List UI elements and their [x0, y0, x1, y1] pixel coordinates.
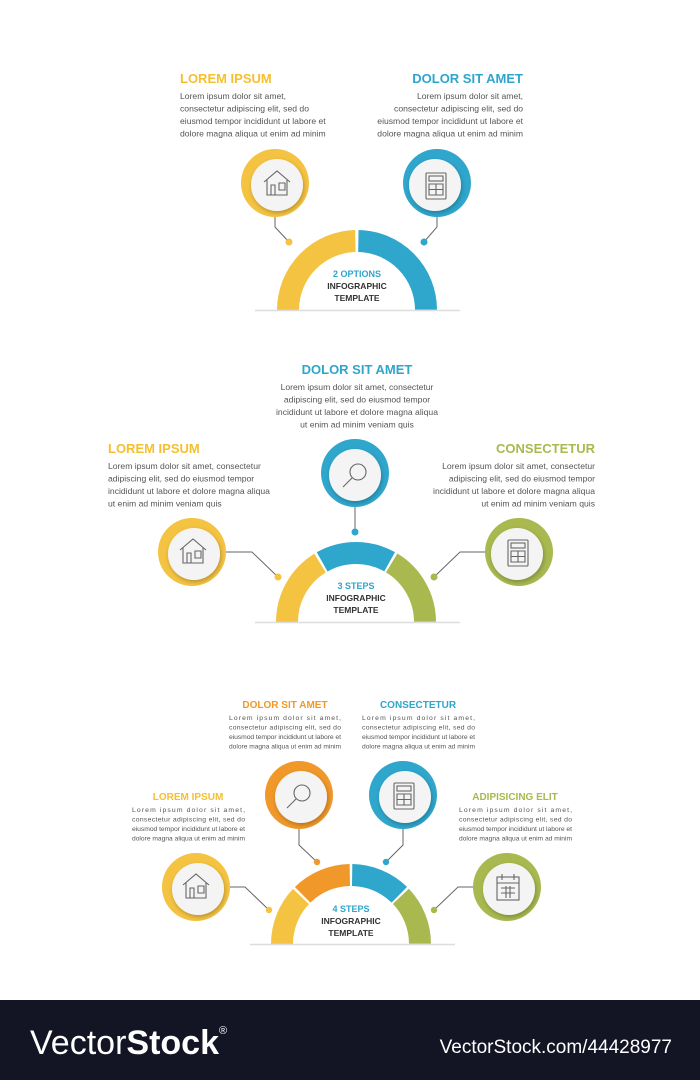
- icon circle: magnifier: [321, 439, 389, 507]
- footer logo: VectorStock: [30, 1024, 219, 1062]
- text block: dolore magna aliqua ut enim ad minim: [459, 836, 572, 842]
- heading: lorem ipsum: LOREM IPSUM: [153, 792, 223, 803]
- icon circle: calculator: [369, 761, 437, 829]
- text block: consectetur adipiscing elit, sed do: [132, 816, 245, 824]
- half ring: [255, 241, 460, 310]
- section 2: 3 steps: [108, 362, 596, 622]
- heading: consectetur: CONSECTETUR: [496, 441, 596, 456]
- text block: dolore magna aliqua ut enim ad minim: [362, 744, 475, 750]
- text block right: Lorem ipsum dolor sit amet,: [417, 91, 523, 101]
- text block: eiusmod tempor incididunt ut labore et: [459, 826, 572, 833]
- icon circle: house: [162, 853, 230, 921]
- text block left: consectetur adipiscing elit, sed do: [180, 104, 309, 114]
- text block: [362, 715, 475, 750]
- text block: consectetur adipiscing elit, sed do: [459, 816, 572, 824]
- center label: 3 STEPS: [337, 581, 375, 591]
- text block top: adipiscing elit, sed do eiusmod tempor: [284, 394, 430, 404]
- text block: consectetur adipiscing elit, sed do: [362, 724, 475, 732]
- text block top: incididunt ut labore et dolore magna aliqua: [276, 407, 438, 417]
- text block: Lorem ipsum dolor sit amet,: [459, 807, 572, 814]
- center label: [327, 269, 387, 303]
- connectors: [275, 217, 437, 246]
- icon circle: house: [158, 518, 226, 586]
- text block top: Lorem ipsum dolor sit amet, consectetur: [281, 382, 434, 392]
- text block right: eiusmod tempor incididunt ut labore et: [377, 116, 524, 126]
- center label: 2 OPTIONS: [333, 269, 381, 279]
- center label: [326, 581, 386, 615]
- text block right: dolore magna aliqua ut enim ad minim: [377, 128, 523, 138]
- center label: INFOGRAPHIC: [327, 281, 387, 291]
- text block left: [108, 461, 270, 508]
- heading: dolor sit amet: DOLOR SIT AMET: [242, 700, 328, 711]
- text block: Lorem ipsum dolor sit amet,: [362, 715, 475, 722]
- icon circle: magnifier: [265, 761, 333, 829]
- text block: dolore magna aliqua ut enim ad minim: [229, 744, 341, 750]
- text block left: [180, 91, 326, 138]
- center label: TEMPLATE: [328, 928, 374, 938]
- center label: INFOGRAPHIC: [321, 916, 381, 926]
- text block right: ut enim ad minim veniam quis: [481, 498, 595, 508]
- footer logo: ®: [219, 1025, 227, 1037]
- center label: TEMPLATE: [334, 293, 380, 303]
- text block right: Lorem ipsum dolor sit amet, consectetur: [442, 461, 595, 471]
- text block right: incididunt ut labore et dolore magna aliqua: [433, 486, 595, 496]
- heading: lorem ipsum: LOREM IPSUM: [180, 71, 272, 86]
- text block: [229, 715, 341, 750]
- heading: dolor sit amet: DOLOR SIT AMET: [412, 71, 523, 86]
- text block right: [377, 91, 524, 138]
- center label: [321, 904, 381, 938]
- icon circle: calendar: [473, 853, 541, 921]
- section 3: 4 steps: [132, 700, 572, 944]
- footer url: VectorStock.com/44428977: [440, 1037, 672, 1058]
- connectors: [230, 829, 473, 913]
- text block left: eiusmod tempor incididunt ut labore et: [180, 116, 326, 126]
- text block left: Lorem ipsum dolor sit amet, consectetur: [108, 461, 261, 471]
- text block: Lorem ipsum dolor sit amet,: [229, 715, 341, 722]
- text block: eiusmod tempor incididunt ut labore et: [362, 734, 475, 741]
- text block top: [276, 382, 438, 430]
- text block: dolore magna aliqua ut enim ad minim: [132, 836, 245, 842]
- text block: [132, 807, 245, 842]
- center label: 4 STEPS: [332, 904, 370, 914]
- text block left: incididunt ut labore et dolore magna aliqua: [108, 486, 270, 496]
- text block right: [433, 461, 595, 508]
- icon circle: calculator: [485, 518, 553, 586]
- half ring: [255, 553, 460, 622]
- text block right: adipiscing elit, sed do eiusmod tempor: [449, 474, 595, 484]
- text block top: ut enim ad minim veniam quis: [300, 420, 414, 430]
- half ring: [250, 875, 455, 944]
- text block left: dolore magna aliqua ut enim ad minim: [180, 128, 326, 138]
- text block: consectetur adipiscing elit, sed do: [229, 724, 341, 732]
- heading: lorem ipsum: LOREM IPSUM: [108, 441, 200, 456]
- footer bar: [0, 1000, 700, 1080]
- heading: consectetur: CONSECTETUR: [380, 700, 457, 711]
- section 1: 2 options: [180, 71, 524, 310]
- text block: eiusmod tempor incididunt ut labore et: [229, 734, 341, 741]
- text block left: Lorem ipsum dolor sit amet,: [180, 91, 286, 101]
- text block: [459, 807, 572, 842]
- heading: adipisicing elit: ADIPISICING ELIT: [472, 792, 558, 803]
- center label: INFOGRAPHIC: [326, 593, 386, 603]
- text block right: consectetur adipiscing elit, sed do: [394, 104, 523, 114]
- icon circle: house: [241, 149, 309, 217]
- center label: TEMPLATE: [333, 605, 379, 615]
- text block: Lorem ipsum dolor sit amet,: [132, 807, 245, 814]
- text block left: ut enim ad minim veniam quis: [108, 498, 222, 508]
- text block left: adipiscing elit, sed do eiusmod tempor: [108, 474, 254, 484]
- icon circle: calculator: [403, 149, 471, 217]
- text block: eiusmod tempor incididunt ut labore et: [132, 826, 245, 833]
- heading: dolor sit amet: DOLOR SIT AMET: [302, 362, 412, 377]
- connectors: [226, 507, 486, 580]
